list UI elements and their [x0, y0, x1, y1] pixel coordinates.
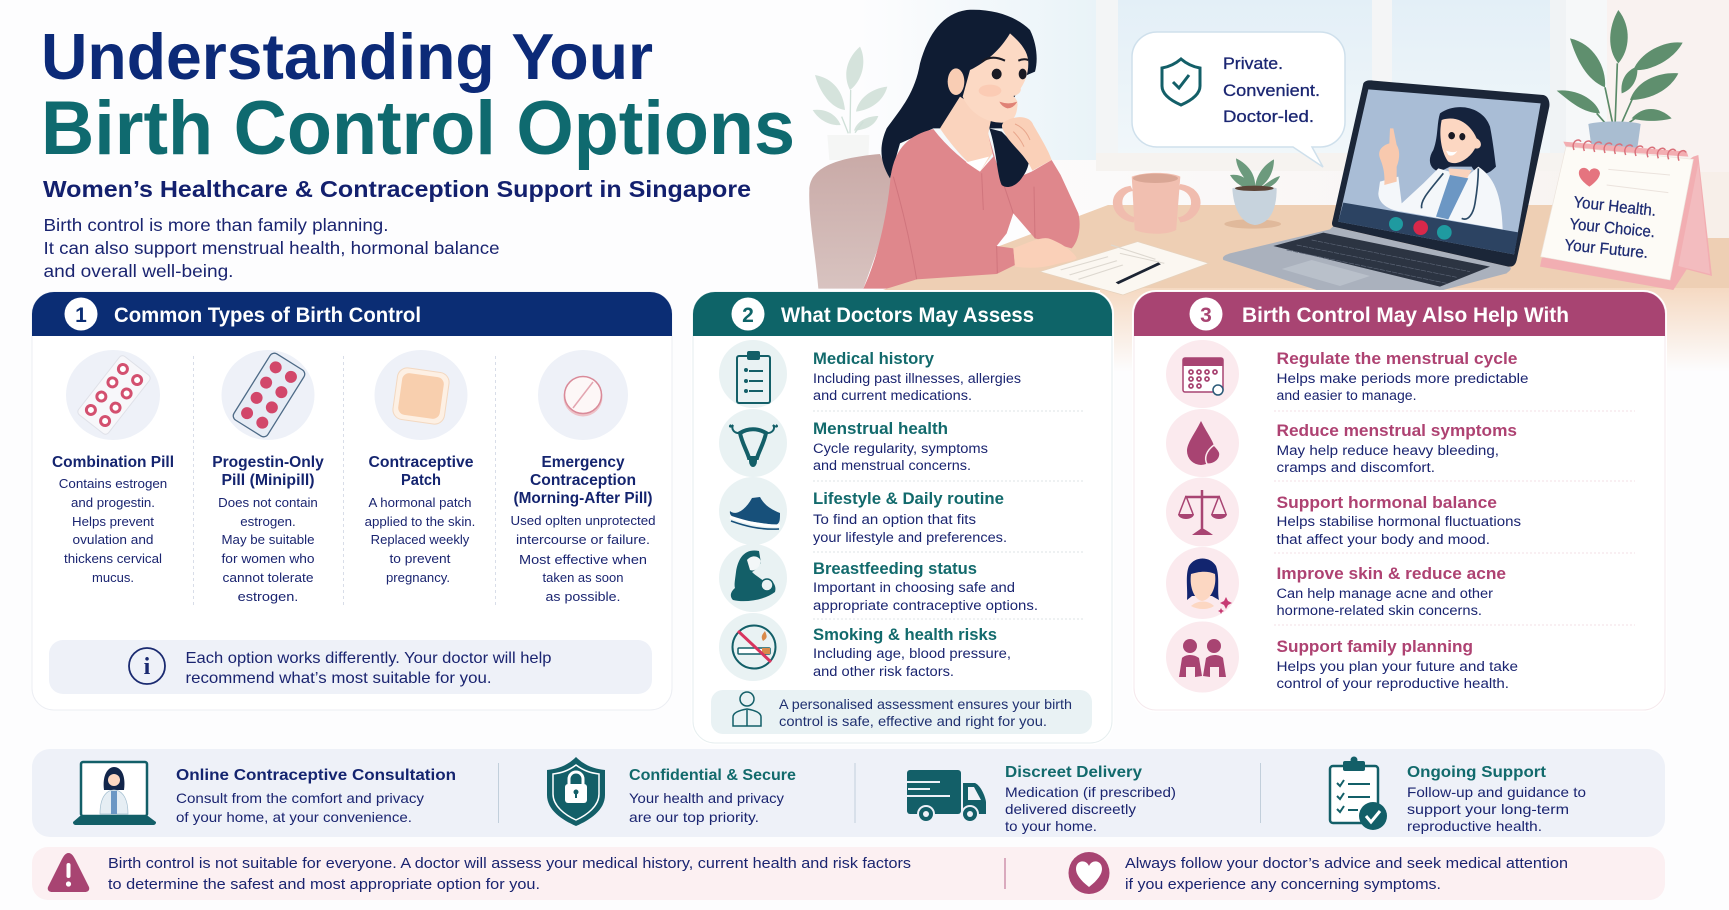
type: progestin-only pill: [212, 454, 324, 604]
item: online consultation: Consult from the comfort and privacy: [176, 790, 424, 806]
assessment note: A personalised assessment ensures your birth: [779, 696, 1072, 712]
row: medical history: and current medications.: [813, 388, 972, 403]
type: emergency contraception: taken as soon: [542, 570, 624, 585]
row: smoking: Smoking & health risks: [813, 626, 997, 644]
type: contraceptive patch: pregnancy.: [386, 570, 450, 585]
icon: shield with lock: [547, 757, 605, 826]
icon: clipboard: [719, 340, 787, 408]
type: contraceptive patch: [365, 454, 475, 585]
back hair: [881, 10, 1037, 178]
info note: i: [144, 654, 151, 680]
row: symptoms: Reduce menstrual symptoms: [1276, 422, 1517, 440]
item: discreet delivery: [1005, 764, 1176, 834]
title: [41, 20, 795, 171]
item: ongoing support: Ongoing Support: [1407, 764, 1547, 781]
row: regulate: and easier to manage.: [1276, 388, 1416, 403]
row: family planning: [1276, 638, 1518, 691]
assessment note: [711, 690, 1092, 734]
type: contraceptive patch: to prevent: [390, 551, 451, 566]
warning text: [108, 856, 911, 893]
type: emergency contraception: [510, 454, 656, 604]
advice text: Always follow your doctor’s advice and seek medical attention: [1125, 856, 1568, 872]
panel: what doctors may assess: 2: [742, 304, 754, 327]
panel: birth control may also help with: [1134, 292, 1665, 710]
panel: birth control may also help with: 3: [1200, 304, 1212, 327]
icon: running shoe: [719, 477, 787, 545]
icon: clipboard check: [1330, 756, 1387, 830]
row: medical history: Including past illnesses, allergies: [813, 371, 1021, 386]
row: family planning: Helps you plan your future and take: [1276, 659, 1518, 674]
type: combination pill: and progestin.: [71, 495, 155, 510]
row: family planning: control of your reproductive health.: [1276, 676, 1509, 691]
calendar text: Your Future.: [1564, 237, 1649, 262]
illustration: woman at desk in video consultation: [809, 0, 1729, 372]
icon: balance scale: [1166, 478, 1239, 546]
item: online consultation: of your home, at your convenience.: [176, 809, 412, 825]
icon: emergency pill: [538, 350, 628, 440]
title: Birth Control Options: [41, 86, 795, 171]
warning text: Birth control is not suitable for everyone. A doctor will assess your medical history, current health and risk factors: [108, 856, 911, 872]
desk plant: [1224, 158, 1281, 229]
icon: warning: [48, 853, 89, 892]
type: emergency contraception: intercourse or failure.: [516, 532, 650, 547]
type: emergency contraception: Contraception: [530, 472, 636, 489]
intro text: It can also support menstrual health, hormonal balance: [44, 238, 499, 258]
row: menstrual health: and menstrual concerns.: [813, 458, 971, 473]
row: menstrual health: Cycle regularity, symptoms: [813, 441, 988, 456]
item: confidential: Confidential & Secure: [629, 767, 796, 784]
type: emergency contraception: Most effective when: [519, 552, 647, 567]
type: emergency contraception: (Morning-After Pill): [514, 490, 652, 507]
row: lifestyle: your lifestyle and preferences.: [813, 530, 1007, 545]
icon: calendar: [1166, 340, 1239, 408]
item: ongoing support: [1407, 764, 1586, 834]
type: progestin-only pill: May be suitable: [222, 532, 314, 547]
panel 1 heading: Common Types of Birth Control: [114, 304, 421, 327]
row: lifestyle: [813, 490, 1007, 545]
row: regulate: [1276, 350, 1528, 403]
icon: heart: [1068, 852, 1110, 894]
panel 3 heading: Birth Control May Also Help With: [1242, 304, 1569, 327]
item: ongoing support: Follow-up and guidance to: [1407, 784, 1586, 800]
row: hormonal balance: Helps stabilise hormonal fluctuations: [1276, 514, 1521, 529]
icon: no smoking: [719, 613, 787, 681]
row: smoking: [813, 626, 1011, 679]
row: lifestyle: To find an option that fits: [813, 512, 976, 527]
item: confidential: [629, 767, 796, 825]
item: discreet delivery: Medication (if prescribed): [1005, 784, 1176, 800]
desk: [883, 205, 1729, 290]
item: online consultation: Online Contraceptive Consultation: [176, 767, 456, 784]
panel: common types of birth control: [32, 292, 672, 710]
row: smoking: Including age, blood pressure,: [813, 646, 1011, 661]
warning text: to determine the safest and most appropriate option for you.: [108, 877, 540, 893]
type: combination pill: Combination Pill: [52, 454, 174, 471]
row: medical history: Medical history: [813, 350, 935, 368]
type: combination pill: ovulation and: [72, 532, 154, 547]
row: menstrual health: Menstrual health: [813, 420, 948, 438]
row: hormonal balance: Support hormonal balance: [1276, 494, 1497, 512]
row: hormonal balance: that affect your body and mood.: [1276, 532, 1490, 547]
type: progestin-only pill: for women who: [222, 551, 314, 566]
icon: shield: [1162, 59, 1200, 105]
benefits band: [32, 749, 1665, 837]
type: combination pill: Contains estrogen: [59, 476, 167, 491]
bubble text: Doctor-led.: [1223, 107, 1314, 126]
item: discreet delivery: delivered discreetly: [1005, 801, 1136, 817]
type: progestin-only pill: estrogen.: [238, 589, 298, 604]
row: smoking: and other risk factors.: [813, 664, 954, 679]
background plant: [813, 47, 887, 160]
type: emergency contraception: Used oplten unprotected: [510, 513, 656, 528]
panel 2 heading: What Doctors May Assess: [781, 304, 1034, 327]
disclaimer band: [32, 847, 1665, 900]
speech bubble: private, convenient, doctor-led: [1132, 32, 1345, 167]
icon: minipill blister: [222, 350, 314, 440]
row: breastfeeding: Important in choosing safe and: [813, 580, 1015, 595]
icon: drop: [1166, 409, 1239, 477]
type: combination pill: [52, 454, 174, 585]
row: skin: Improve skin & reduce acne: [1276, 565, 1506, 583]
bubble text: Convenient.: [1223, 81, 1320, 100]
bubble text: Private.: [1223, 54, 1283, 73]
bubble text: [1223, 54, 1320, 126]
assessment note: control is safe, effective and right for you.: [779, 713, 1047, 729]
calendar text: [1564, 194, 1657, 262]
chin hand: [1002, 117, 1052, 171]
front hair strand: [989, 128, 1029, 187]
intro text: [44, 215, 499, 281]
type: progestin-only pill: Does not contain: [218, 495, 318, 510]
icon: truck: [902, 770, 986, 823]
type: contraceptive patch: applied to the skin.: [365, 514, 475, 529]
type: combination pill: Helps prevent: [72, 514, 154, 529]
subtitle: Women’s Healthcare & Contraception Support in Singapore: [43, 176, 751, 202]
icon: uterus: [719, 409, 787, 477]
icon: breastfeeding: [719, 544, 787, 612]
type: progestin-only pill: cannot tolerate: [222, 570, 314, 585]
icon: patch: [374, 350, 468, 440]
intro text: and overall well-being.: [44, 261, 234, 281]
row: breastfeeding: Breastfeeding status: [813, 560, 977, 578]
calendar text: Your Health.: [1573, 194, 1657, 220]
woman: [809, 10, 1080, 289]
calendar text: Your Choice.: [1569, 216, 1656, 241]
row: skin: hormone-related skin concerns.: [1276, 603, 1482, 618]
neck: [940, 97, 993, 172]
info note: Each option works differently. Your doctor will help: [186, 650, 552, 667]
advice text: if you experience any concerning symptoms.: [1125, 877, 1441, 893]
row: skin: [1276, 565, 1506, 618]
row: hormonal balance: [1276, 494, 1521, 547]
icon: laptop doctor: [73, 762, 156, 825]
type: contraceptive patch: Replaced weekly: [371, 532, 470, 547]
face: [963, 33, 1028, 123]
type: combination pill: thickens cervical: [64, 551, 162, 566]
type: emergency contraception: Emergency: [542, 454, 625, 471]
row: medical history: [813, 350, 1021, 403]
row: symptoms: [1276, 422, 1517, 475]
plant and desk calendar: [1540, 10, 1712, 290]
resting hand: [1013, 238, 1077, 268]
item: confidential: are our top priority.: [629, 809, 759, 825]
info note: [49, 640, 652, 694]
type: contraceptive patch: A hormonal patch: [368, 495, 472, 510]
advice text: [1125, 856, 1568, 893]
type: progestin-only pill: Progestin-Only: [212, 454, 324, 471]
title: Understanding Your: [41, 20, 653, 93]
row: symptoms: cramps and discomfort.: [1276, 460, 1435, 475]
info note: recommend what’s most suitable for you.: [186, 670, 492, 687]
row: family planning: Support family planning: [1276, 638, 1473, 656]
row: lifestyle: Lifestyle & Daily routine: [813, 490, 1004, 508]
item: ongoing support: reproductive health.: [1407, 818, 1542, 834]
panel: what doctors may assess: [693, 292, 1112, 743]
item: online consultation: [176, 767, 456, 825]
type: progestin-only pill: estrogen.: [240, 514, 296, 529]
item: ongoing support: support your long-term: [1407, 801, 1569, 817]
type: combination pill: mucus.: [92, 570, 134, 585]
row: breastfeeding: [813, 560, 1038, 613]
panel: common types of birth control: 1: [75, 304, 87, 327]
row: regulate: Helps make periods more predictable: [1276, 371, 1528, 386]
row: symptoms: May help reduce heavy bleeding,: [1276, 443, 1499, 458]
item: confidential: Your health and privacy: [629, 790, 784, 806]
row: regulate: Regulate the menstrual cycle: [1276, 350, 1518, 368]
row: skin: Can help manage acne and other: [1276, 586, 1494, 601]
intro text: Birth control is more than family planning.: [44, 215, 389, 235]
type: contraceptive patch: Contraceptive: [368, 454, 474, 471]
chair: [809, 154, 892, 289]
icon: two people: [1166, 622, 1239, 692]
row: menstrual health: [813, 420, 988, 473]
laptop: [1223, 80, 1549, 290]
icon: combination pill blister: [66, 350, 160, 440]
item: discreet delivery: Discreet Delivery: [1005, 764, 1142, 781]
type: progestin-only pill: Pill (Minipill): [222, 472, 314, 489]
icon: face: [1166, 547, 1239, 619]
sweater: [863, 129, 1080, 289]
row: breastfeeding: appropriate contraceptive options.: [813, 598, 1038, 613]
item: discreet delivery: to your home.: [1005, 818, 1097, 834]
type: contraceptive patch: Patch: [401, 472, 441, 489]
type: emergency contraception: as possible.: [546, 589, 620, 604]
cup, notebook: [1040, 173, 1209, 295]
